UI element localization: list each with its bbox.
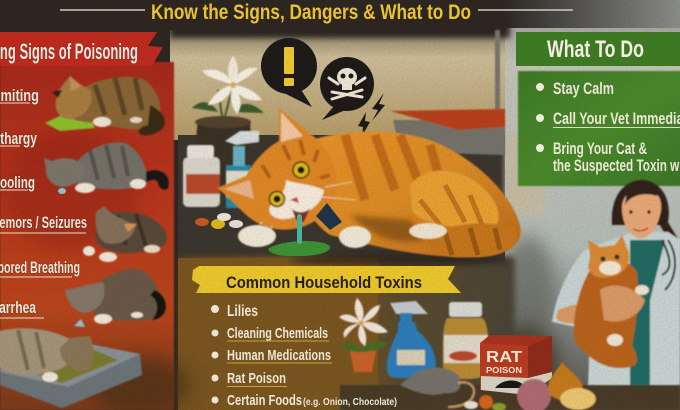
toxin: rat poison [212,370,287,387]
bottle: medication [183,145,220,207]
heading banner [192,266,461,293]
poison puddle [268,241,330,256]
heading [516,32,680,66]
toxin: human medications [212,347,332,364]
sign: labored breathing [0,258,166,327]
hair [612,180,680,245]
panel: common household toxins [192,266,596,410]
cat: large orange poisoned cat [217,108,521,266]
jar: medication [443,302,488,379]
speech bubble: warning [261,38,317,107]
box: rat poison: POISON [486,365,522,375]
panel: what to do [516,32,680,186]
head [217,108,356,246]
sign: tremors and seizures [0,206,167,262]
food: onions and pills [464,362,596,410]
cat: in litter box [0,328,93,382]
sign: vomiting [0,76,165,135]
litter tray on shelf [390,109,505,155]
plant: lily in vase [192,56,264,182]
panel: central scene [183,38,521,266]
toxin: certain foods: Certain Foods [227,392,302,409]
litter box [0,344,142,408]
face [622,190,661,238]
collar [316,203,342,230]
bottle: blue cleaner [387,301,436,378]
speech bubble: skull [320,57,374,120]
sign: lethargy [0,129,169,193]
scrubs [630,240,665,385]
sign: diarrhea [0,298,142,408]
heading: What To Do [547,36,644,63]
toxin: certain foods [212,392,397,409]
toxin: certain foods: (e.g. Onion, Chocolate) [303,396,397,408]
toxin: rat poison: Rat Poison [227,370,286,387]
icon: lightning bolts [358,93,385,136]
coat [552,232,680,385]
panel: warning signs of poisoning [0,32,190,410]
box: rat poison: RAT [486,349,522,366]
illustration: vet holding cat [552,180,680,385]
step: stay calm [536,80,614,98]
heading banner: Common Household Toxins [226,273,422,292]
plant: potted lily [339,298,388,372]
toxin: cleaning chemicals: Cleaning Chemicals [227,325,328,342]
stethoscope [662,240,675,290]
cat: brown vomiting [45,76,165,135]
toxin: lilies: Lilies [227,303,258,320]
step: bring your cat [536,140,680,175]
toxin: human medications: Human Medications [227,347,331,364]
heading ribbon [0,32,163,66]
box: rat poison [480,335,552,395]
cat: grey lethargic [44,142,169,193]
bottle: spray cleaner [225,131,259,208]
toxin: lilies [211,303,258,320]
title: Know the Signs, Dangers & What to Do [151,1,471,24]
step: stay calm: Stay Calm [553,80,614,98]
held cat [574,258,638,368]
cat: tremoring [83,206,167,262]
paws [238,225,276,247]
pills [195,213,243,229]
arm [556,303,606,324]
illustration: rat [400,368,474,407]
toxin: cleaning chemicals [212,325,329,342]
body [296,132,521,257]
cat: labored breathing [65,269,166,327]
